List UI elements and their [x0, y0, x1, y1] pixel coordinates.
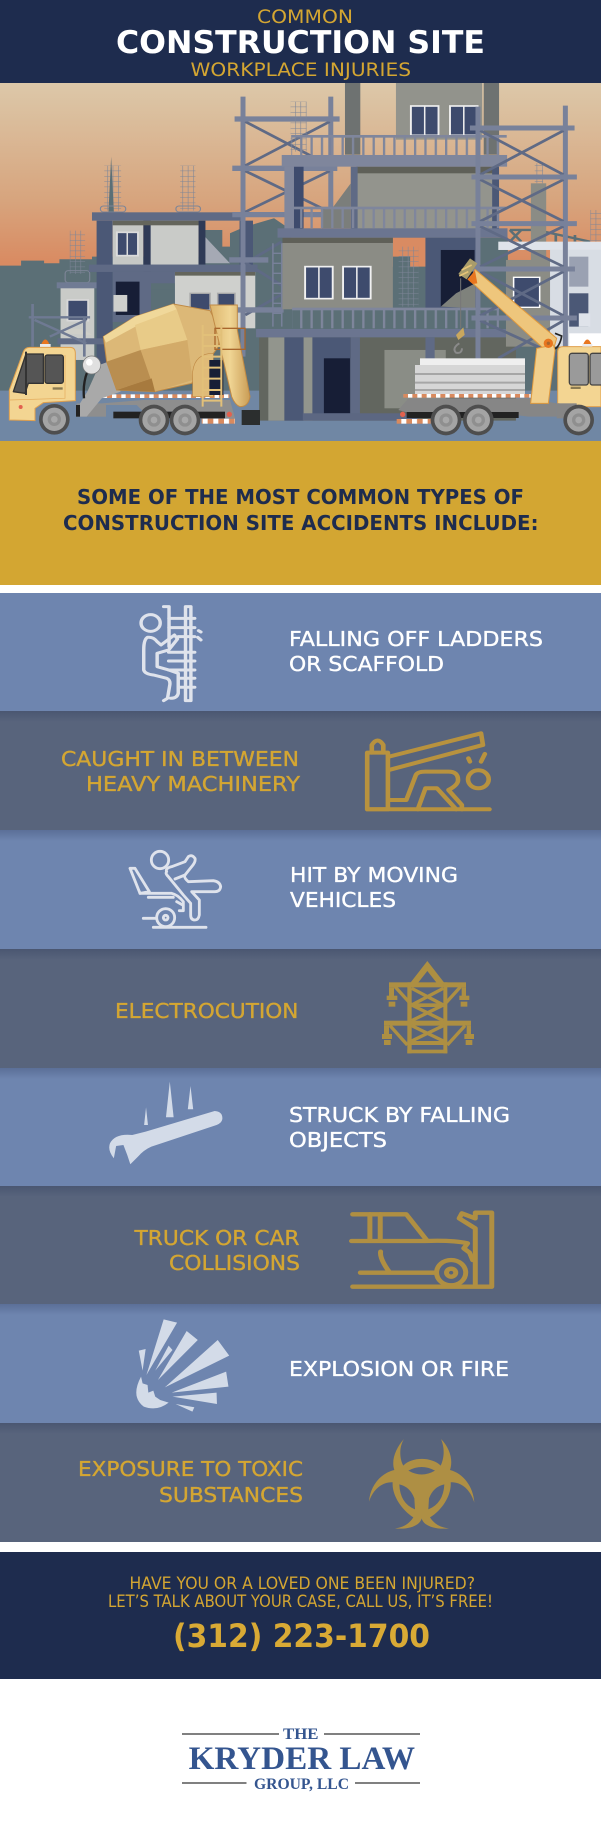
title line: common: COMMON	[257, 6, 353, 28]
label: EXPOSURE TO TOXIC	[78, 1457, 303, 1481]
label: ELECTROCUTION	[115, 999, 298, 1023]
label: SUBSTANCES	[159, 1483, 303, 1507]
panel: falling off ladders	[0, 593, 601, 711]
icon: person hit by car	[130, 851, 221, 927]
label: STRUCK BY FALLING	[289, 1103, 510, 1127]
label	[133, 1226, 300, 1275]
label: OBJECTS	[289, 1128, 387, 1152]
header band	[0, 0, 601, 83]
title line: workplace injuries: WORKPLACE INJURIES	[190, 59, 411, 81]
label	[290, 863, 458, 912]
call to action text: LET’S TALK ABOUT YOUR CASE, CALL US, IT’S FREE!	[108, 1592, 493, 1611]
title line: construction site: CONSTRUCTION SITE	[116, 25, 485, 61]
label: HEAVY MACHINERY	[86, 772, 301, 796]
illustration: construction site with trucks	[0, 83, 601, 441]
panel: intro gold band	[0, 441, 601, 585]
logo: The Kryder Law Group, LLC: GROUP, LLC	[254, 1776, 349, 1793]
concrete mixer truck	[9, 304, 260, 435]
label	[78, 1457, 303, 1507]
call to action text: HAVE YOU OR A LOVED ONE BEEN INJURED?	[130, 1574, 475, 1593]
label	[61, 747, 301, 796]
label: EXPLOSION OR FIRE	[289, 1357, 509, 1381]
logo: The Kryder Law Group, LLC: KRYDER LAW	[189, 1741, 415, 1777]
label: TRUCK OR CAR	[133, 1226, 300, 1250]
intro heading: SOME OF THE MOST COMMON TYPES OF	[77, 485, 524, 509]
panel: call to action	[0, 1552, 601, 1679]
panel: electrocution	[0, 949, 601, 1068]
intro heading: CONSTRUCTION SITE ACCIDENTS INCLUDE:	[63, 511, 538, 535]
label	[289, 627, 543, 676]
icon: worker under machine arm	[367, 733, 489, 809]
icon: car hitting wall	[351, 1213, 492, 1287]
icon: power pylon	[382, 961, 474, 1053]
icon: biohazard symbol	[369, 1439, 474, 1529]
intro heading	[63, 485, 538, 535]
panel: exposure to toxic substances	[0, 1423, 601, 1542]
icon: climber on ladder	[141, 607, 201, 701]
label: OR SCAFFOLD	[289, 652, 444, 676]
label	[289, 1103, 510, 1152]
label: VEHICLES	[290, 888, 396, 912]
panel: struck by falling objects	[0, 1068, 601, 1186]
crane flatbed truck	[397, 258, 601, 435]
icon: falling wrench	[109, 1082, 222, 1164]
call to action text	[108, 1574, 493, 1611]
label: COLLISIONS	[169, 1251, 300, 1275]
icon: explosion burst	[136, 1319, 229, 1412]
logo: The Kryder Law Group, LLC: THE	[283, 1726, 318, 1743]
label: HIT BY MOVING	[290, 863, 458, 887]
logo: The Kryder Law Group, LLC	[182, 1726, 420, 1793]
panel: explosion or fire	[0, 1304, 601, 1423]
phone number: (312) 223-1700	[173, 1617, 430, 1655]
building scene	[0, 83, 601, 441]
panel: hit by moving vehicles	[0, 830, 601, 949]
panel: caught in machinery	[0, 711, 601, 830]
label: FALLING OFF LADDERS	[289, 627, 543, 651]
label: CAUGHT IN BETWEEN	[61, 747, 299, 771]
panel: truck or car collisions	[0, 1186, 601, 1304]
